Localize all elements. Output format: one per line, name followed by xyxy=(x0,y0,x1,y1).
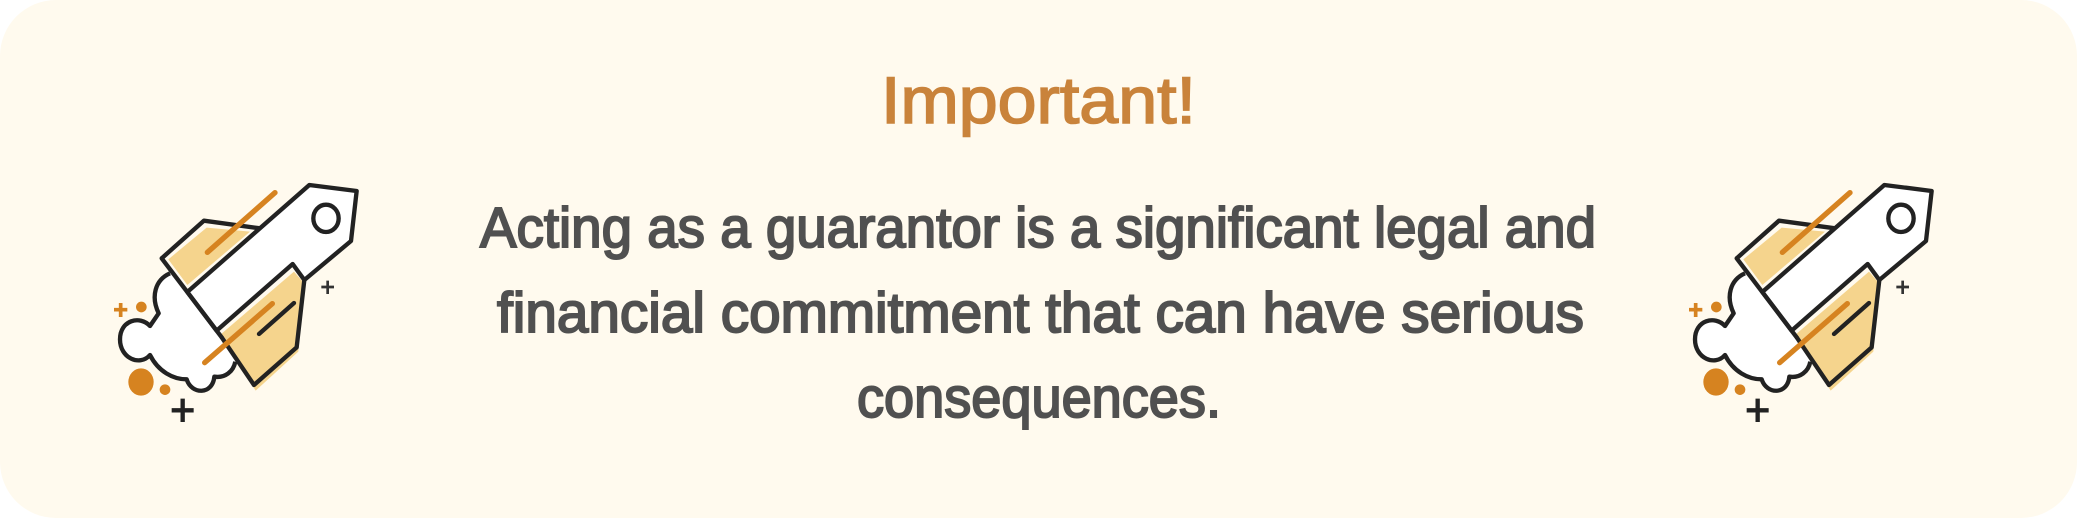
icon: left rocket xyxy=(114,185,357,422)
heading: Important!: Important! xyxy=(881,63,1196,137)
text block: guarantor warning: consequences. xyxy=(857,366,1221,430)
icon: right rocket xyxy=(1689,185,1932,422)
text block: guarantor warning: Acting as a guarantor is a significant legal and xyxy=(480,196,1596,260)
text block: guarantor warning xyxy=(480,196,1596,430)
text block: guarantor warning: financial commitment that can have serious xyxy=(497,281,1584,345)
